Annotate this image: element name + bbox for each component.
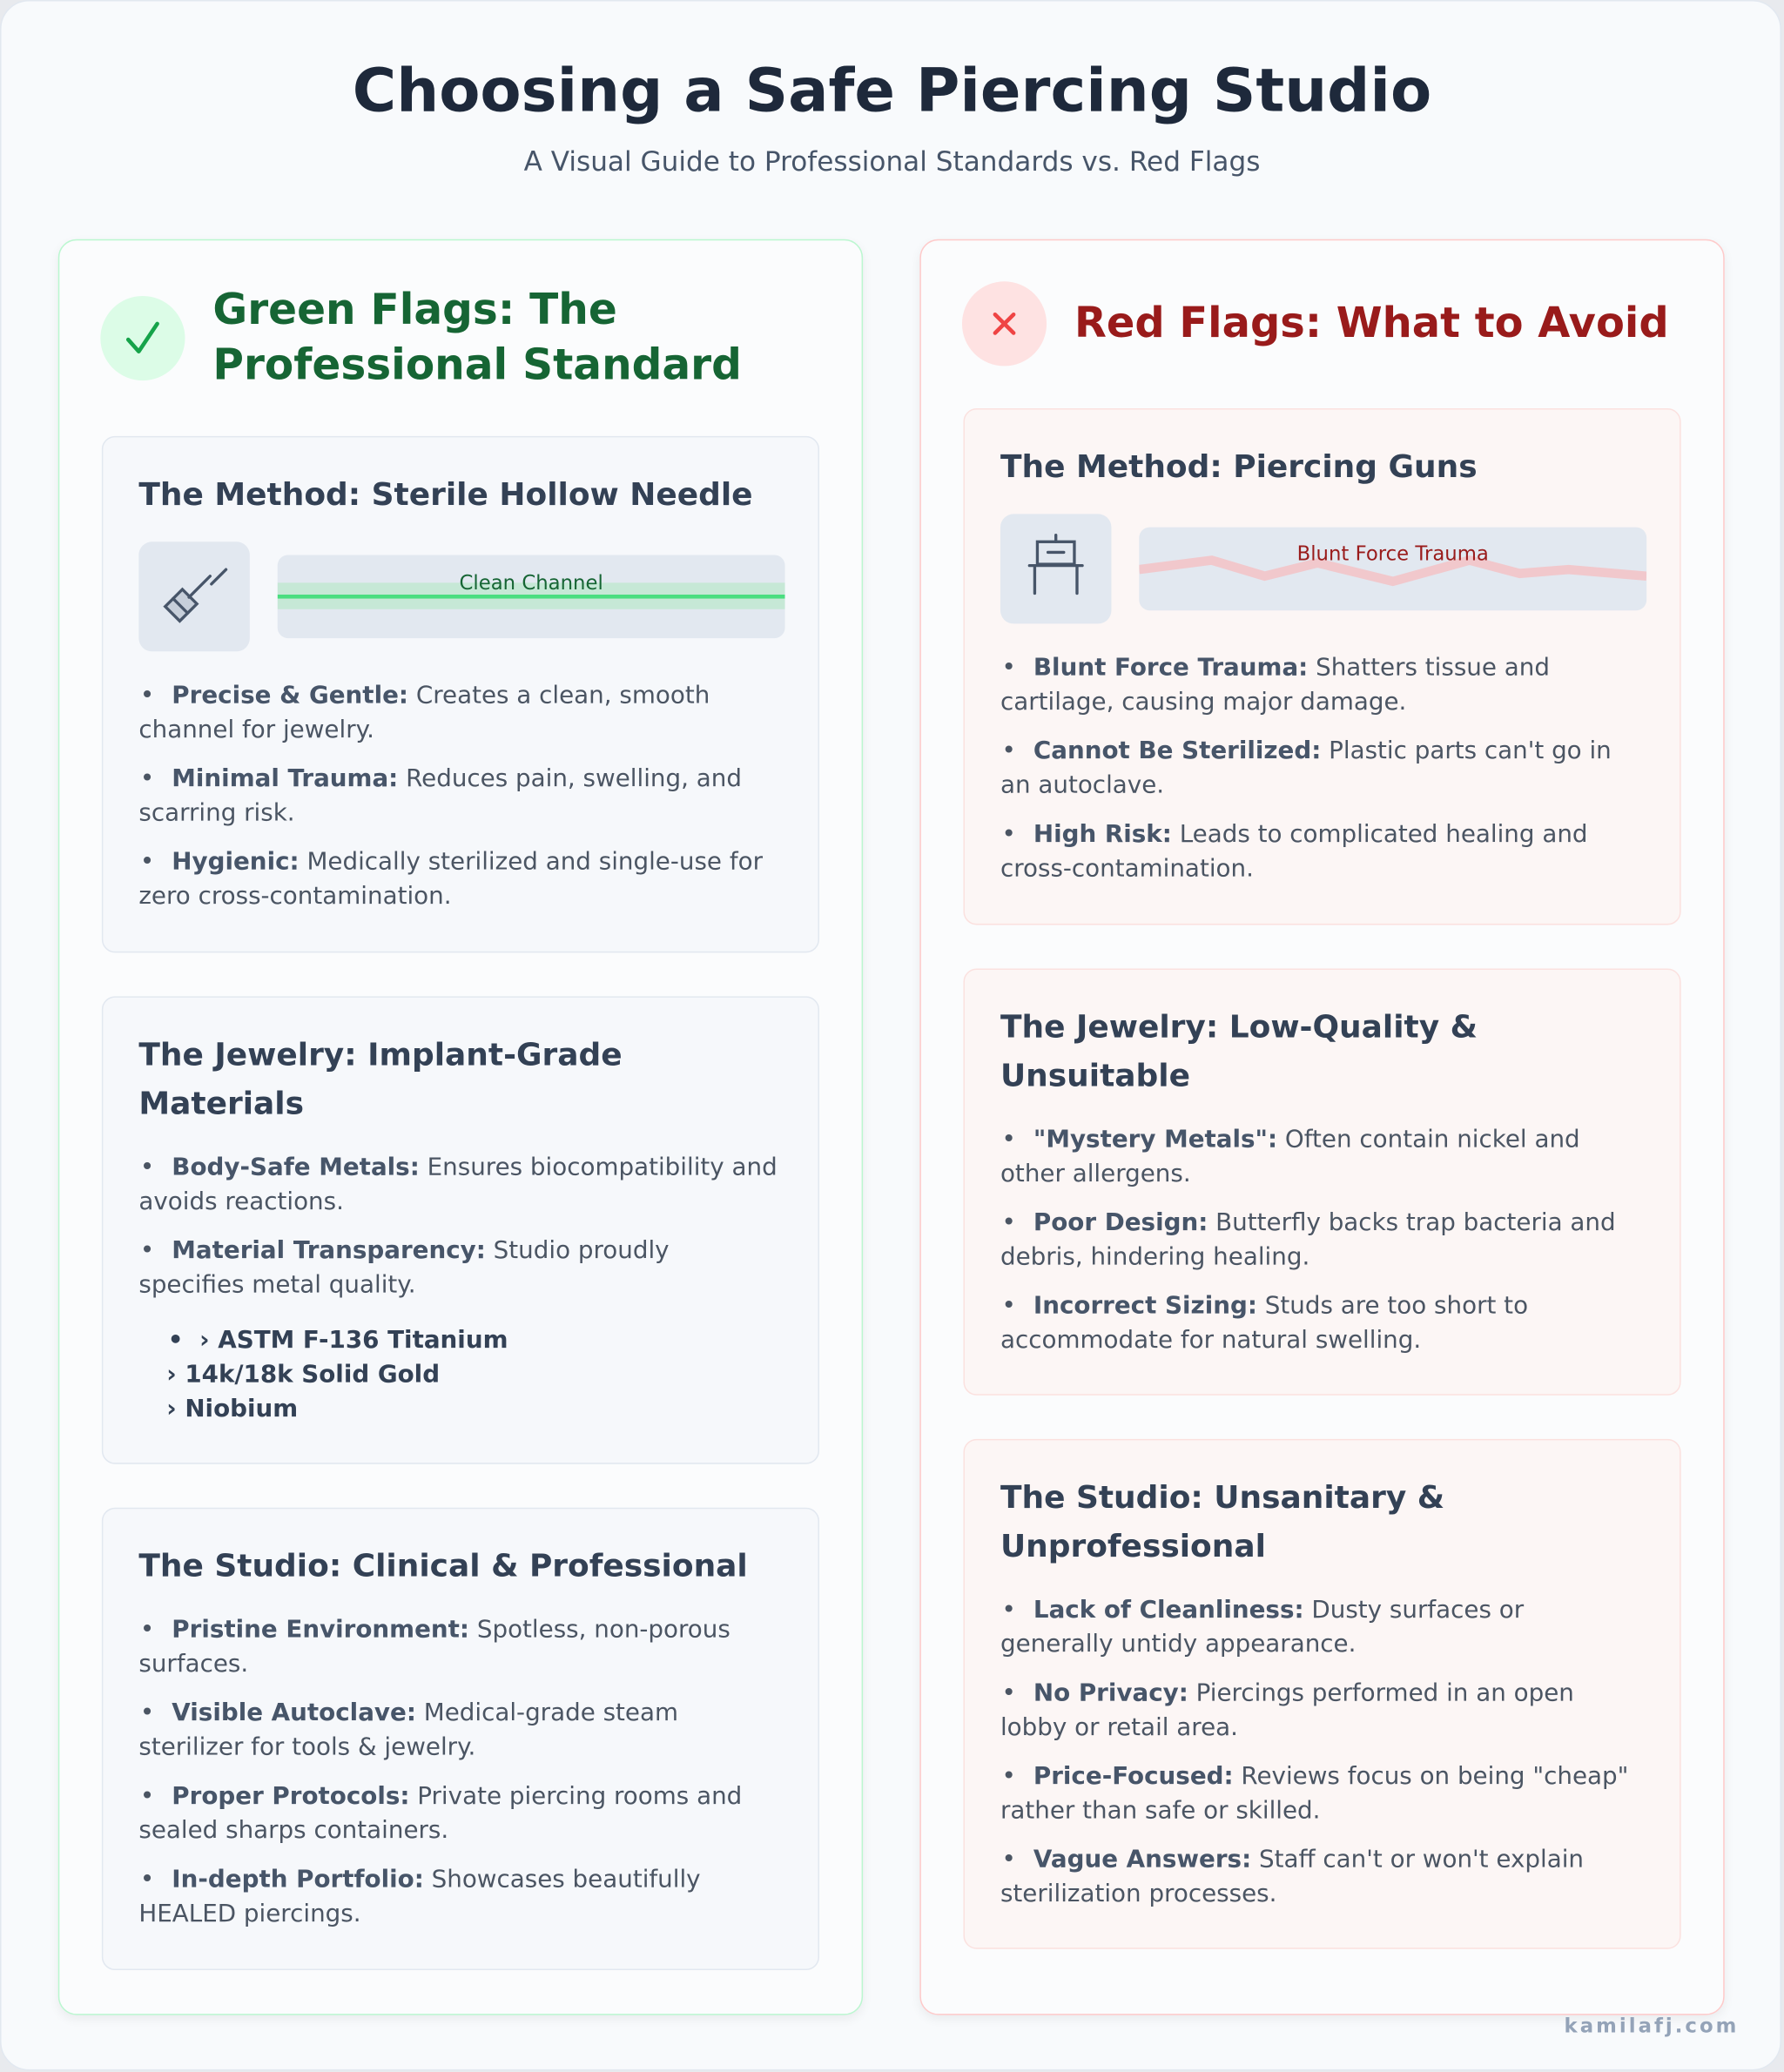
bullets: rather than safe or skilled. (1000, 1797, 1320, 1825)
bullets: • (140, 765, 154, 793)
bullets: lobby or retail area. (1000, 1714, 1238, 1741)
bullets: • (1001, 1846, 1016, 1874)
bullets (138, 1616, 742, 1927)
panel: red flags (919, 239, 1725, 2015)
gun visual (1000, 514, 1647, 623)
bullets: • (140, 1699, 154, 1727)
bullets: Visible Autoclave: Medical-grade steam (172, 1699, 678, 1727)
card title: Materials (138, 1085, 304, 1122)
bullets: High Risk: Leads to complicated healing and (1033, 821, 1588, 848)
bullets (1000, 1126, 1616, 1355)
chart: clean channel: Clean Channel (459, 571, 603, 595)
bullets: accommodate for natural swelling. (1000, 1327, 1421, 1355)
bullets: debris, hindering healing. (1000, 1243, 1309, 1271)
heading: red flags: Red Flags: What to Avoid (1074, 300, 1669, 347)
bullets: Material Transparency: Studio proudly (172, 1237, 670, 1265)
bullets: • (140, 1616, 154, 1644)
footer: site credit: kamilafj.com (1565, 2014, 1739, 2037)
bullets: • (1001, 1679, 1016, 1707)
bullets: • (140, 1866, 154, 1894)
bullets: Body-Safe Metals: Ensures biocompatibility and (172, 1154, 778, 1181)
bullets: • (1001, 1292, 1016, 1320)
card: studio (102, 1508, 819, 1970)
card title: The Studio: Clinical & Professional (138, 1547, 748, 1584)
bullets: • (1001, 737, 1016, 765)
card title: The Method: Piercing Guns (1000, 448, 1478, 485)
bullets: No Privacy: Piercings performed in an open (1033, 1679, 1574, 1707)
panel: green flags (58, 239, 863, 2015)
bullets: Blunt Force Trauma: Shatters tissue and (1033, 654, 1550, 682)
card: piercing guns (963, 408, 1681, 925)
bullets: HEALED piercings. (138, 1900, 361, 1927)
card title (1000, 1008, 1478, 1094)
card: jewelry (102, 996, 819, 1464)
card title: Unprofessional (1000, 1528, 1266, 1564)
card: unsanitary studio (963, 1439, 1681, 1949)
bullets: • (1001, 1209, 1016, 1237)
bullets: Minimal Trauma: Reduces pain, swelling, and (172, 765, 742, 793)
chart: blunt force trauma (1139, 528, 1646, 610)
bullets: Pristine Environment: Spotless, non-porous (172, 1616, 730, 1644)
subtitle: A Visual Guide to Professional Standards vs. Red Flags (524, 145, 1260, 177)
heading: green flags: Green Flags: The (212, 284, 617, 334)
bullets: • (1001, 1763, 1016, 1791)
bullets: Hygienic: Medically sterilized and single-use for (172, 848, 763, 876)
bullets: • (1001, 654, 1016, 682)
heading: green flags (212, 284, 742, 390)
icon: piercing gun (1000, 514, 1111, 623)
card title: The Jewelry: Low-Quality & (1000, 1008, 1478, 1046)
bullets (138, 1154, 778, 1423)
icon: needle (138, 542, 250, 651)
heading: green flags: Professional Standard (212, 340, 742, 390)
bullets: Proper Protocols: Private piercing rooms and (172, 1782, 742, 1810)
bullets: Poor Design: Butterfly backs trap bacteria and (1033, 1209, 1616, 1237)
card: method needle (102, 436, 819, 952)
bullets: surfaces. (138, 1651, 248, 1678)
bullets: › 14k/18k Solid Gold (166, 1361, 440, 1389)
bullets: › ASTM F-136 Titanium (199, 1327, 508, 1355)
bullets: • (1001, 1596, 1016, 1624)
chart: clean channel (278, 555, 785, 638)
icon: x mark (962, 281, 1047, 366)
bullets: generally untidy appearance. (1000, 1631, 1356, 1658)
bullets: • (140, 1154, 154, 1181)
bullets: cartilage, causing major damage. (1000, 689, 1406, 716)
bullets: Precise & Gentle: Creates a clean, smooth (172, 682, 710, 710)
bullets: • (140, 1782, 154, 1810)
bullets: Vague Answers: Staff can't or won't explain (1033, 1846, 1584, 1874)
bullets: specifies metal quality. (138, 1271, 416, 1299)
bullets: • (1001, 821, 1016, 848)
bullets: sealed sharps containers. (138, 1817, 448, 1845)
card title: The Method: Sterile Hollow Needle (138, 475, 753, 513)
card title: The Jewelry: Implant-Grade (138, 1036, 623, 1073)
bullets: sterilization processes. (1000, 1880, 1276, 1908)
bullets (1000, 1596, 1628, 1908)
bullets: • (1001, 1126, 1016, 1154)
chart: blunt force trauma: Blunt Force Trauma (1297, 542, 1489, 566)
needle visual (139, 542, 785, 651)
card title (1000, 1478, 1444, 1564)
bullets: an autoclave. (1000, 771, 1164, 799)
bullets: • (140, 848, 154, 876)
bullets: scarring risk. (138, 799, 295, 827)
bullets: • (140, 1237, 154, 1265)
bullets: zero cross-contamination. (138, 883, 452, 911)
title: Choosing a Safe Piercing Studio (353, 56, 1431, 125)
card title: Unsuitable (1000, 1057, 1190, 1094)
bullets: other allergens. (1000, 1160, 1191, 1187)
card title: The Studio: Unsanitary & (1000, 1478, 1444, 1516)
bullets: Incorrect Sizing: Studs are too short to (1033, 1292, 1528, 1320)
bullets: "Mystery Metals": Often contain nickel and (1033, 1126, 1580, 1154)
bullets: cross-contamination. (1000, 855, 1254, 883)
bullets: sterilizer for tools & jewelry. (138, 1733, 475, 1761)
bullets: Lack of Cleanliness: Dusty surfaces or (1033, 1596, 1524, 1624)
bullets: In-depth Portfolio: Showcases beautifully (172, 1866, 701, 1894)
card: low-quality jewelry (963, 969, 1681, 1396)
bullets: avoids reactions. (138, 1187, 344, 1215)
bullets: • (168, 1327, 183, 1355)
bullets (138, 682, 763, 911)
bullets: Cannot Be Sterilized: Plastic parts can't go in (1033, 737, 1612, 765)
icon: check mark (100, 296, 185, 380)
bullets: • (140, 682, 154, 710)
bullets: Price-Focused: Reviews focus on being "cheap" (1033, 1763, 1628, 1791)
bullets: channel for jewelry. (138, 716, 374, 744)
card title (138, 1036, 623, 1122)
bullets (1000, 654, 1612, 883)
bullets: › Niobium (166, 1396, 298, 1423)
